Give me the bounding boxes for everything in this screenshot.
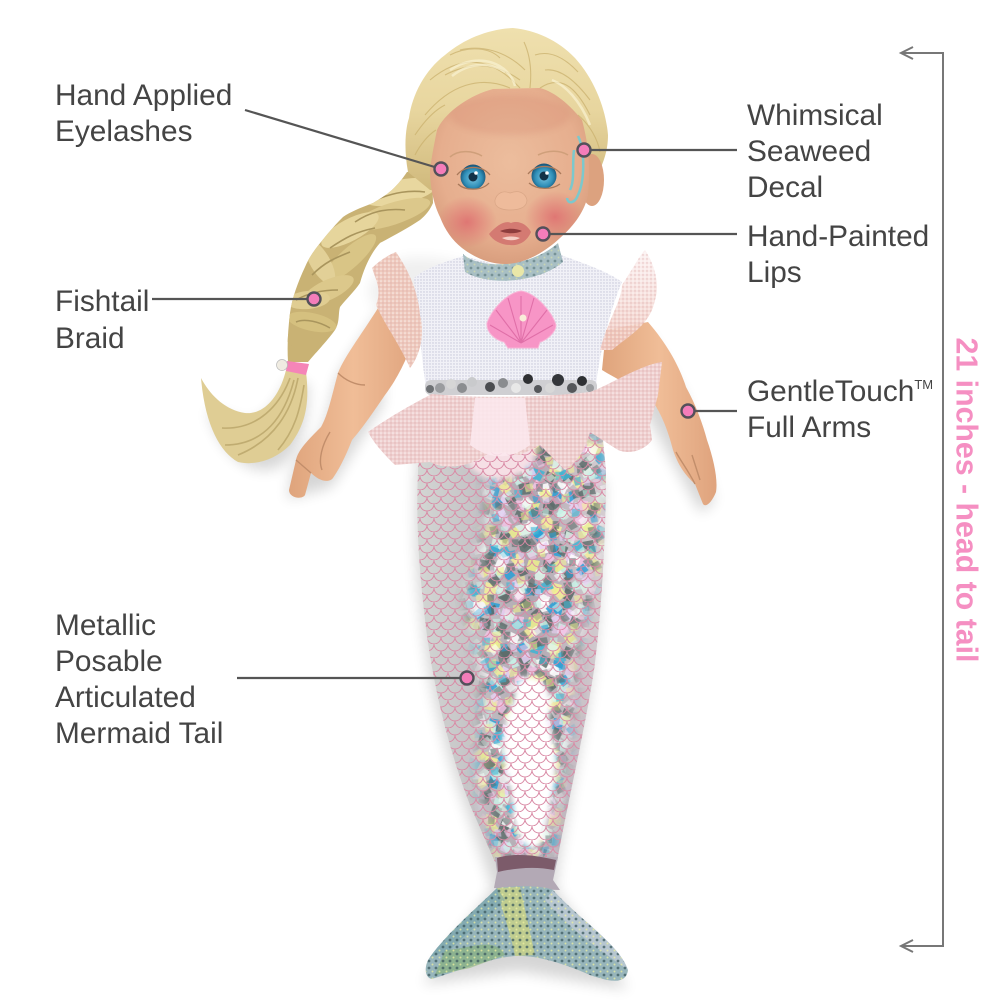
right arm — [602, 322, 717, 505]
dress bodice — [414, 254, 622, 388]
callout: metallic posable articulated mermaid tail: Mermaid Tail — [55, 717, 223, 750]
callout: hand-painted lips: Lips — [747, 256, 802, 289]
callout: hand-painted lips: Hand-Painted — [747, 220, 929, 253]
right eye — [528, 164, 561, 188]
callout: fishtail braid: Fishtail — [55, 285, 149, 318]
hair band with pearl — [276, 360, 309, 375]
head hair — [405, 28, 608, 190]
shell applique — [487, 291, 556, 348]
callout: whimsical seaweed decal: Whimsical — [747, 99, 883, 132]
callout: gentletouch full arms: GentleTouch — [747, 375, 914, 408]
lips — [489, 222, 531, 245]
callout: metallic posable articulated mermaid tail: Metallic — [55, 609, 156, 642]
eyebrows — [450, 151, 568, 157]
callout: fishtail braid: Braid — [55, 322, 125, 355]
nose — [495, 192, 527, 210]
callout: hand applied eyelashes: Eyelashes — [55, 115, 192, 148]
finger and elbow creases — [296, 373, 700, 484]
doll soft shadow — [208, 258, 714, 989]
callout: whimsical seaweed decal: Decal — [747, 171, 823, 204]
face — [430, 88, 589, 264]
callout: gentletouch full arms: Full Arms — [747, 411, 871, 444]
tail fin — [426, 886, 628, 981]
callout: whimsical seaweed decal — [578, 99, 883, 204]
right sleeve ruffle — [600, 250, 657, 350]
left sleeve ruffle — [372, 252, 422, 368]
callout: hand applied eyelashes: Hand Applied — [55, 79, 232, 112]
callout: whimsical seaweed decal: Seaweed — [747, 135, 871, 168]
fishtail braid — [283, 170, 440, 362]
hair — [201, 28, 608, 463]
tulle peplum — [368, 362, 662, 470]
mermaid tail — [417, 432, 606, 862]
cheek blush — [442, 97, 580, 244]
sequin waistband — [425, 374, 597, 395]
doll illustration — [201, 28, 717, 981]
left arm — [289, 300, 418, 498]
height bracket with arrows — [901, 47, 943, 952]
callout: fishtail braid — [55, 285, 320, 355]
right ear — [580, 154, 604, 206]
callout: hand-painted lips — [536, 220, 929, 289]
hair strands — [415, 42, 600, 155]
left eye — [457, 164, 490, 190]
callout: gentletouch full arms: TM — [914, 377, 933, 392]
tail tie — [494, 855, 560, 890]
callout: hand applied eyelashes — [55, 79, 448, 176]
sparkle collar — [463, 243, 563, 281]
braid tail — [201, 370, 307, 463]
callout: metallic posable articulated mermaid tail: Articulated — [55, 681, 196, 714]
callout: metallic posable articulated mermaid tail — [55, 609, 474, 750]
height label: 21 inches - head to tail — [950, 338, 982, 662]
callout: metallic posable articulated mermaid tail: Posable — [55, 645, 163, 678]
seaweed decal — [567, 136, 583, 202]
callout: gentletouch full arms — [682, 375, 933, 444]
